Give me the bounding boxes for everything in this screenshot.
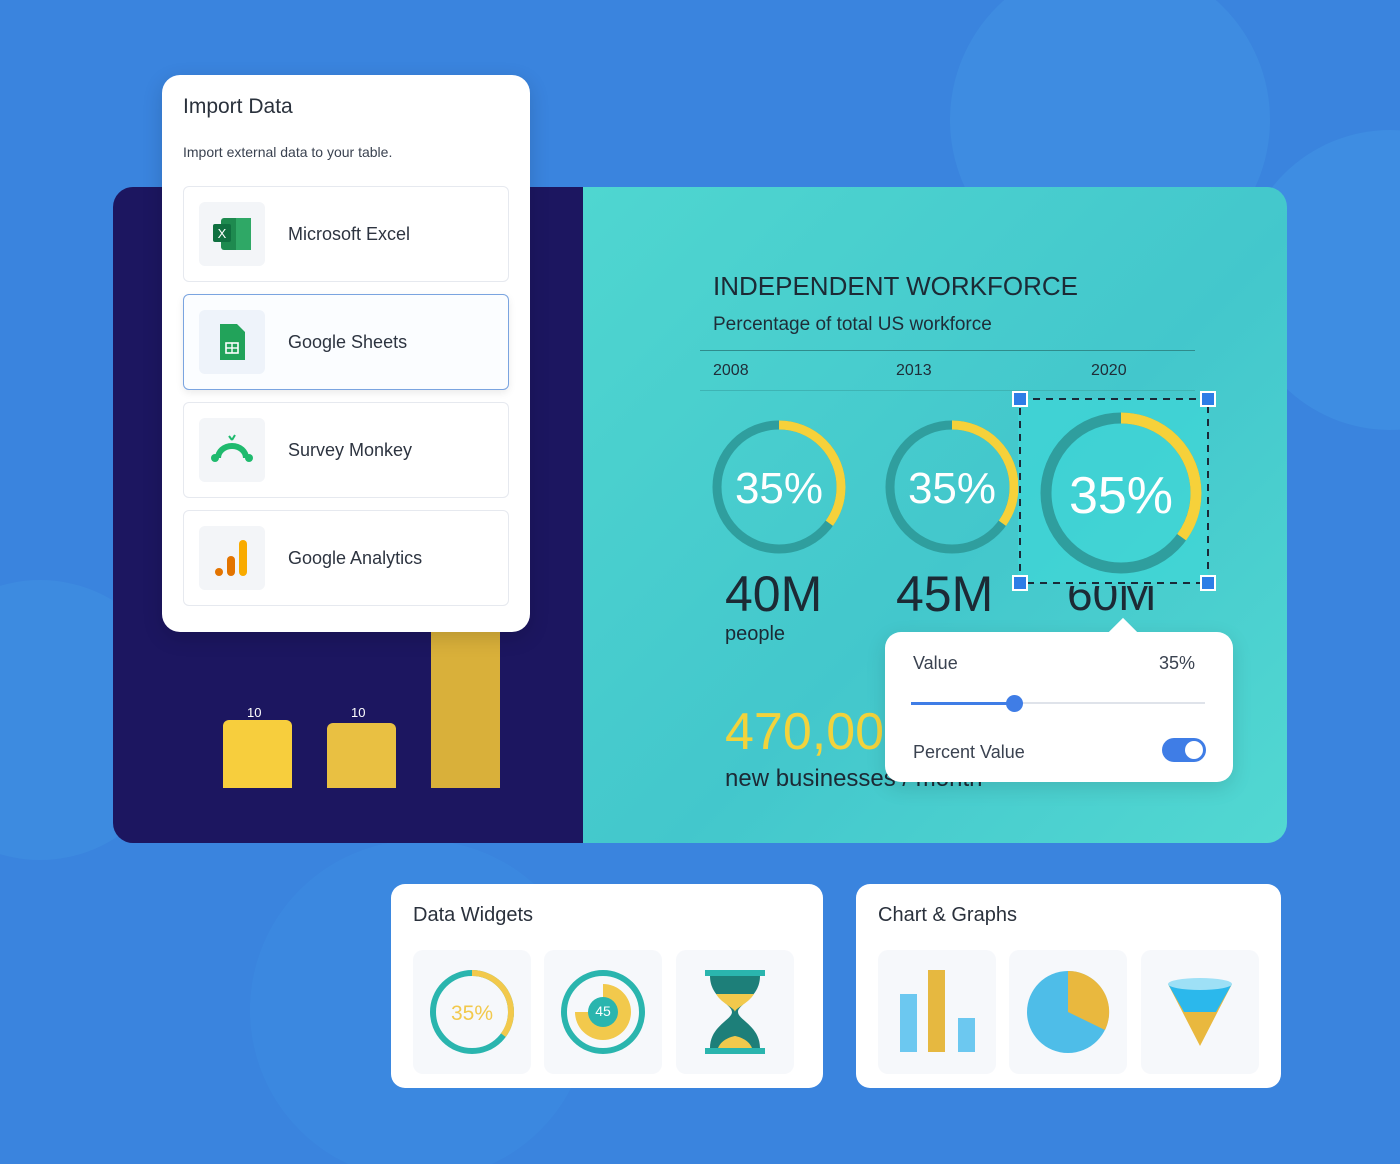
- heading: Import Data: [183, 95, 293, 118]
- bar chart: [223, 632, 500, 788]
- donut rings: 35%: [908, 464, 996, 513]
- panel: dark navy chart: [113, 187, 593, 843]
- item: sheets: [183, 294, 509, 390]
- panel: teal infographic: 45M: [896, 566, 993, 622]
- popup: value slider: Value: [913, 653, 958, 673]
- panel: chart & graphs: Chart & Graphs: [878, 904, 1017, 926]
- item: survey monkey: [183, 402, 509, 498]
- popup: value slider: 35%: [1159, 653, 1195, 673]
- years: 2008: [713, 362, 749, 379]
- popup: value slider: [885, 632, 1233, 782]
- widget: percent donut: [413, 950, 531, 1074]
- bar chart: 10: [351, 705, 365, 720]
- panel: data widgets: Data Widgets: [413, 904, 533, 926]
- panel: teal infographic: 2020: [1091, 362, 1127, 379]
- panel: teal infographic: 2013: [896, 362, 932, 379]
- item: sheets: Google Sheets: [288, 332, 407, 352]
- item: excel: Microsoft Excel: [288, 224, 410, 244]
- widget: timer: 45: [595, 1003, 611, 1019]
- title: INDEPENDENT WORKFORCE: [713, 271, 1078, 301]
- widget: hourglass: [676, 950, 794, 1074]
- panel: import data: [162, 75, 530, 632]
- donut rings: 35%: [735, 464, 823, 513]
- item: excel: X: [218, 226, 227, 241]
- chart icon: funnel: [1141, 950, 1259, 1074]
- item: survey monkey: Survey Monkey: [288, 440, 412, 460]
- panel: teal infographic: people: [725, 623, 785, 645]
- item: analytics: Google Analytics: [288, 548, 422, 568]
- panel: teal infographic: new businesses / month: [725, 765, 982, 792]
- panel: chart & graphs: [856, 884, 1281, 1088]
- panel: data widgets: [391, 884, 823, 1088]
- popup: value slider: Percent Value: [913, 742, 1025, 762]
- stats: 40M: [725, 566, 822, 622]
- widget: percent donut: 35%: [451, 1002, 493, 1025]
- panel: import data: Import external data to your table.: [183, 144, 392, 160]
- widget: timer: [544, 950, 662, 1074]
- panel: teal infographic: 470,000: [725, 703, 913, 761]
- panel: teal infographic: [583, 187, 1287, 843]
- chart icon: bars: [878, 950, 996, 1074]
- bar chart: 10: [247, 705, 261, 720]
- subtitle: Percentage of total US workforce: [713, 314, 992, 335]
- chart icon: pie: [1009, 950, 1127, 1074]
- item: excel: [183, 186, 509, 282]
- donut rings: 35%: [1069, 467, 1173, 525]
- item: analytics: [183, 510, 509, 606]
- donut rings: [712, 391, 1216, 591]
